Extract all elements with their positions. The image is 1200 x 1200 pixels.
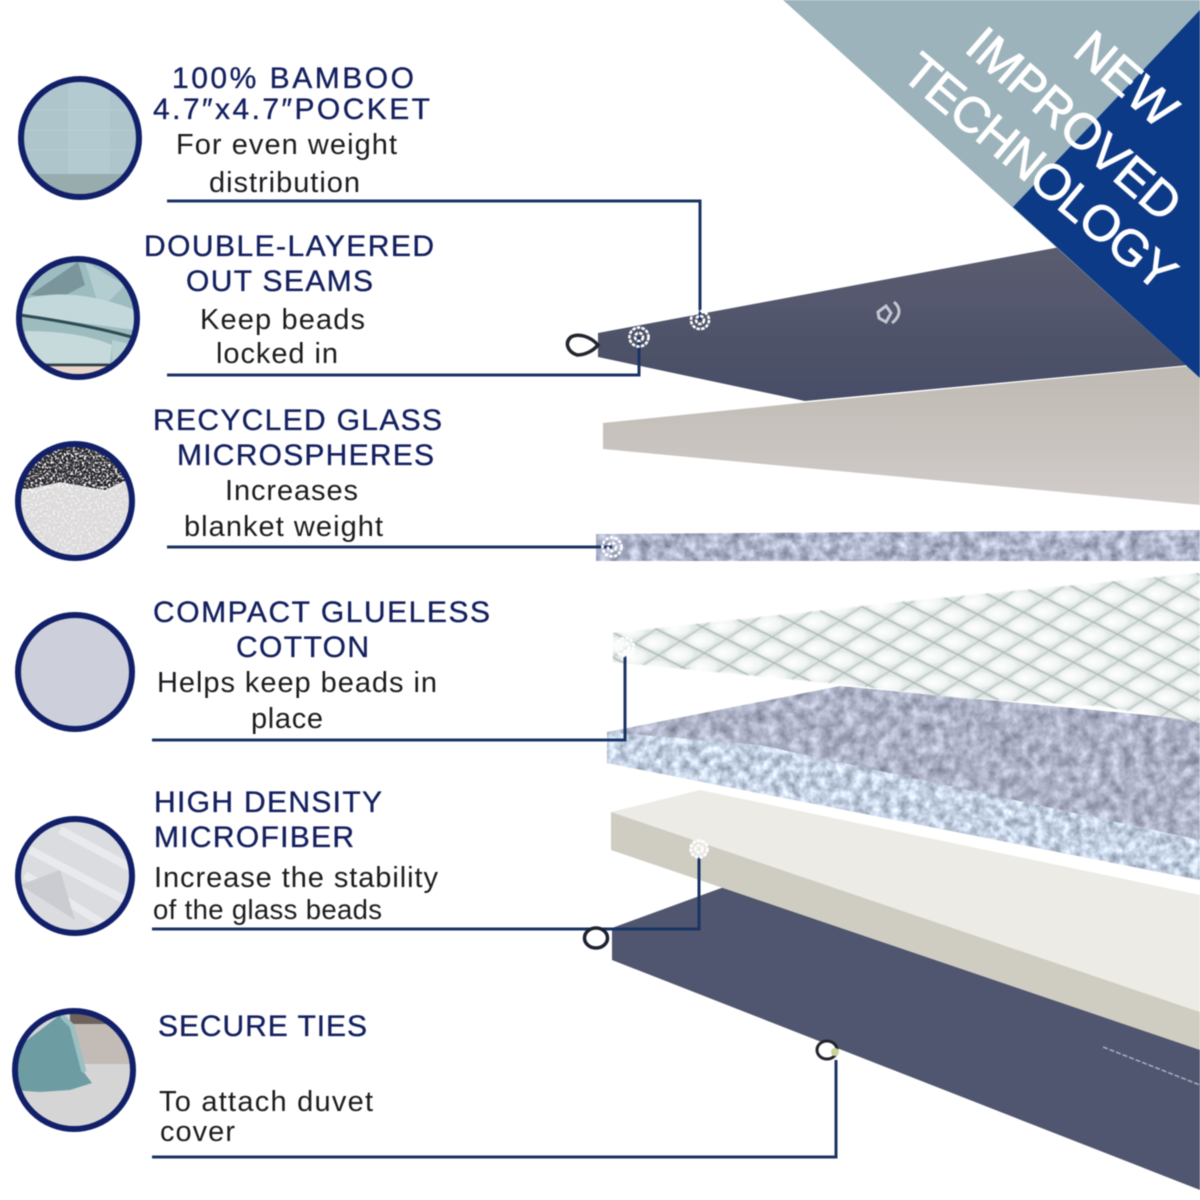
banner: new improved technology: NEW [1064,20,1189,139]
item: compact glueless cotton [18,596,634,740]
heading: DOUBLE-LAYERED [144,230,434,263]
blanket layer: compact cotton [607,686,1200,880]
heading: MICROFIBER [154,821,354,854]
heading: SECURE TIES [158,1010,367,1043]
blanket layer: cream microfiber [611,790,1200,1050]
heading: 100% BAMBOO [172,62,414,95]
blanket layer: taupe bamboo [603,365,1200,505]
leader line [152,1060,836,1157]
target marker [690,840,708,858]
heading [153,596,490,664]
tie loop [817,1041,839,1059]
heading [153,404,442,472]
heading [154,786,382,854]
target marker [616,638,634,656]
item: secure ties [12,1008,839,1157]
icon: glass beads [15,440,135,566]
description [184,475,383,543]
description [176,129,397,199]
heading [144,230,434,298]
heading [153,62,430,126]
heading: COTTON [236,631,369,664]
item: double-layered seams [18,230,648,380]
item: high density microfiber [15,786,708,948]
heading: RECYCLED GLASS [153,404,442,437]
description: distribution [209,167,360,199]
tie on top cover [878,302,899,323]
icon: teal quilted fabric [20,78,140,200]
tie loop [567,335,598,355]
leader line [167,337,639,375]
description [157,667,437,735]
banner: new improved technology [783,0,1200,378]
blanket layer: quilted glass bead pocket [613,573,1200,723]
leader line [152,857,699,929]
target marker [630,328,648,346]
description: For even weight [176,129,397,161]
description: Keep beads [200,304,365,336]
target marker [602,538,622,556]
description: of the glass beads [153,894,382,925]
heading: COMPACT GLUELESS [153,596,490,629]
banner: new improved technology: TECHNOLOGY [892,42,1187,302]
description: blanket weight [184,511,383,543]
blanket layer: top dark cover [598,247,1200,401]
description [200,304,365,370]
heading: MICROSPHERES [177,439,434,472]
description: locked in [216,338,338,370]
heading: HIGH DENSITY [154,786,382,819]
icon: puffy teal seams [18,258,138,380]
description: Increases [225,475,358,507]
leader line [167,546,612,548]
blanket layer: microsphere strip [596,530,1200,561]
description: place [251,703,323,735]
leader line [152,656,625,740]
stitched seam on bottom cover [1103,1047,1200,1085]
icon: white microfiber [15,815,135,940]
description [159,1086,373,1148]
item: recycled glass microspheres [15,404,622,566]
icon: corner tie [12,1008,140,1133]
blanket layer: bottom dark cover [612,883,1200,1190]
tie loop [584,928,608,948]
description [153,862,438,925]
banner: new improved technology: IMPROVED [956,16,1193,232]
description: Increase the stability [154,862,438,894]
heading: OUT SEAMS [186,265,373,298]
target marker [691,311,709,329]
description: cover [160,1116,235,1148]
leader line [167,201,700,320]
description: Helps keep beads in [157,667,437,699]
description: To attach duvet [159,1086,373,1118]
heading: 4.7″x4.7″POCKET [153,93,430,126]
icon: grey cotton [18,615,132,729]
item: 100% bamboo pocket [20,62,709,329]
